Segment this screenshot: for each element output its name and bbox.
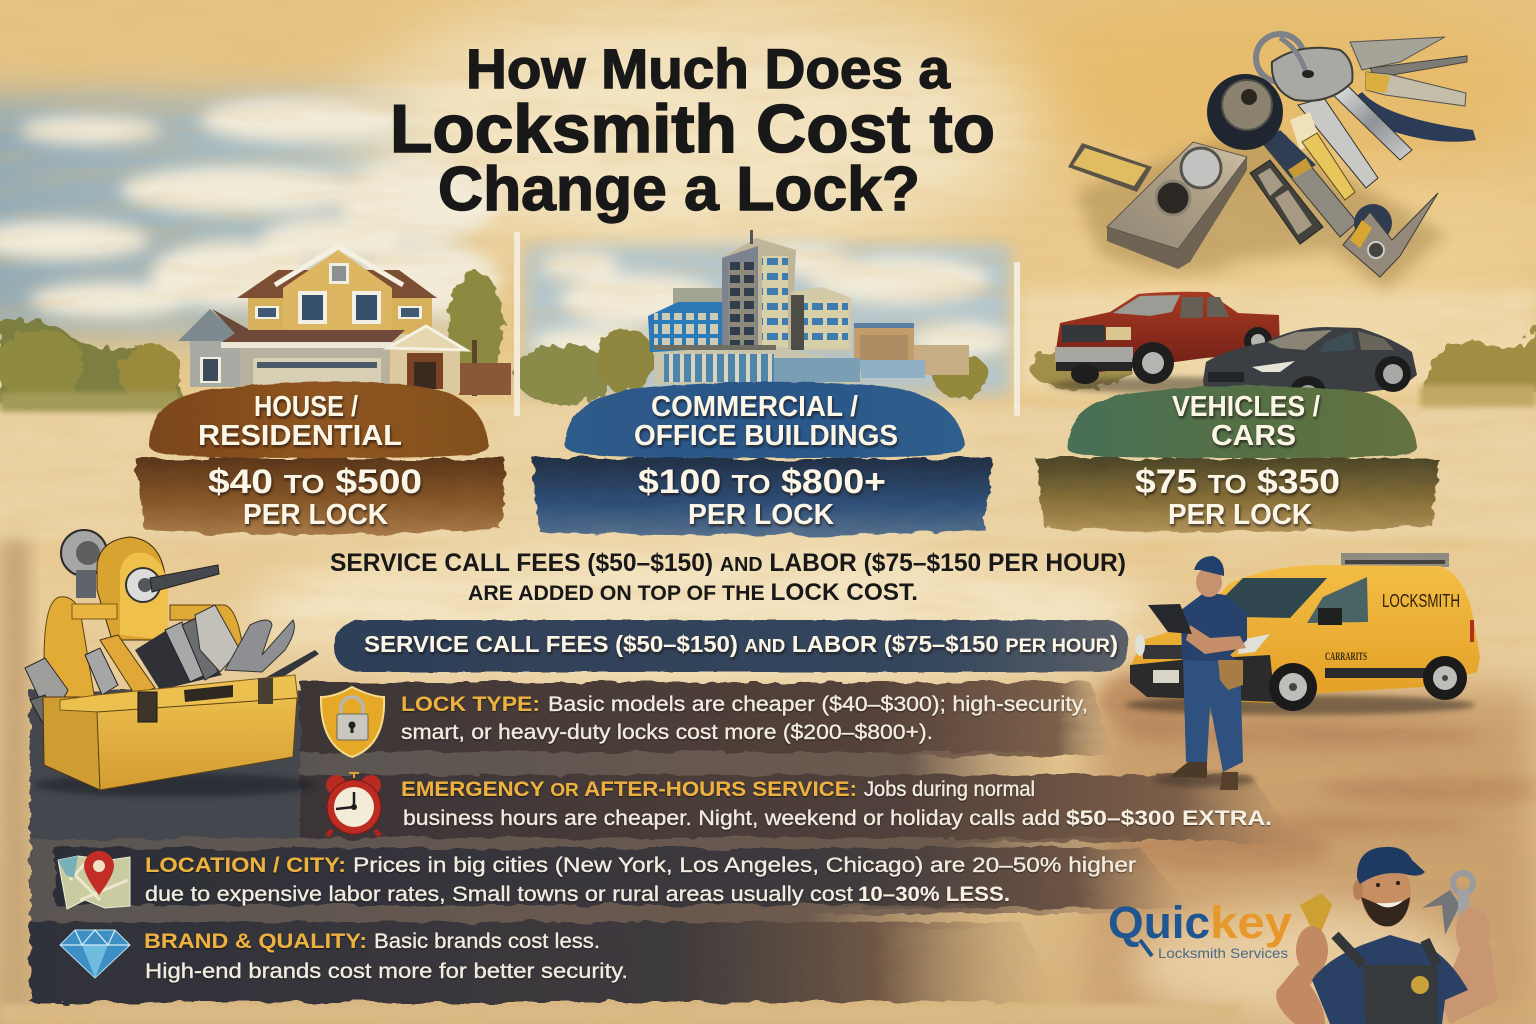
label: house residential xyxy=(198,391,422,531)
band: vehicles price xyxy=(1035,458,1438,532)
icon: alarm clock xyxy=(326,772,381,836)
label: commercial office buildings xyxy=(634,391,898,531)
band: house price xyxy=(135,458,505,535)
note: service call fees: SERVICE CALL FEES ($50–$150) AND LABOR ($75–$150 PER HOUR) xyxy=(330,549,1126,577)
text: location city: 10–30% LESS. xyxy=(858,883,1010,906)
label: house residential: HOUSE / xyxy=(254,391,358,423)
truck wheels xyxy=(1071,327,1272,384)
label: vehicles cars: $75 TO $350 xyxy=(1135,463,1340,501)
van windows xyxy=(1223,577,1368,625)
logo: Quickey Locksmith Services xyxy=(1108,897,1292,961)
text: location city: due to expensive labor rates, Small towns or rural areas usually cost xyxy=(145,883,853,906)
illustration: keys and lock hardware xyxy=(1068,34,1476,290)
label: commercial office buildings: OFFICE BUILDINGS xyxy=(634,420,898,452)
text: emergency service: Jobs during normal xyxy=(864,778,1035,801)
car wheels xyxy=(1289,356,1411,414)
far buildings xyxy=(854,323,969,378)
key ring xyxy=(1256,34,1304,82)
text: location city: Prices in big cities (New York, Los Angeles, Chicago) are 20–50% higher xyxy=(353,854,1136,877)
tower xyxy=(722,230,796,350)
clamp and handle xyxy=(44,530,243,700)
roof rack xyxy=(1341,553,1449,567)
title: Locksmith Cost to xyxy=(390,91,995,167)
illustration: house xyxy=(178,246,511,396)
van bumper and grille xyxy=(1130,620,1474,702)
illustration: technician with clipboard xyxy=(1148,556,1255,790)
text: lock type: Basic models are cheaper ($40–$300); high-security, xyxy=(548,693,1088,716)
text: brand and quality: High-end brands cost more for better security. xyxy=(145,960,628,983)
head xyxy=(1194,556,1224,597)
car lights and grille xyxy=(1208,361,1295,382)
tool pouch xyxy=(1218,660,1243,690)
fanned keys xyxy=(1262,37,1476,237)
label: commercial office buildings: COMMERCIAL / xyxy=(651,391,858,423)
torso xyxy=(1181,592,1247,662)
label: commercial office buildings: PER LOCK xyxy=(688,499,834,531)
note: service call fees xyxy=(330,549,1126,606)
pill: service call fees banner xyxy=(334,620,1128,672)
boots xyxy=(1170,762,1238,790)
text: lock type: smart, or heavy-duty locks cost more ($200–$800+). xyxy=(401,721,933,744)
apron xyxy=(1335,935,1438,1024)
logo: Quickey Locksmith Services: key xyxy=(1210,897,1292,948)
illustration: pickup truck xyxy=(1050,292,1290,393)
text: location city: LOCATION / CITY: xyxy=(145,854,346,877)
title: How Much Does a xyxy=(466,37,951,100)
cab windows xyxy=(1113,295,1229,318)
illustration: locksmith van xyxy=(1125,553,1480,715)
bottom tool xyxy=(1343,193,1438,277)
key fob xyxy=(1250,160,1323,244)
side wing xyxy=(791,287,851,350)
illustration: sedan car xyxy=(1203,327,1417,414)
band: commercial price xyxy=(532,458,992,536)
white poles xyxy=(514,232,1020,416)
gable trim xyxy=(275,246,403,285)
pill: vehicles xyxy=(1067,386,1417,458)
gold tag xyxy=(1068,143,1152,192)
torso xyxy=(1312,935,1468,1024)
icon: shield with padlock xyxy=(321,687,384,757)
title xyxy=(390,37,995,224)
label: house residential: RESIDENTIAL xyxy=(198,420,402,452)
text: brand and quality xyxy=(144,930,628,983)
left wrench xyxy=(25,658,82,750)
van wheels xyxy=(1269,656,1467,711)
panel: dark textured background behind factors xyxy=(30,682,1300,1002)
label: house residential: $40 TO $500 xyxy=(208,463,422,501)
porch xyxy=(388,326,466,393)
pill: service call fees banner: SERVICE CALL FEES ($50–$150) AND LABOR ($75–$150 PER HOUR) xyxy=(364,631,1118,657)
van body xyxy=(1130,565,1480,703)
bumper and grille xyxy=(1055,325,1133,371)
lower roof xyxy=(222,330,405,344)
text: lock type xyxy=(401,693,1088,744)
arms xyxy=(1276,945,1498,1024)
illustration: smiling locksmith with keys xyxy=(1276,847,1498,1024)
pill: house xyxy=(149,382,489,458)
hand keys xyxy=(1296,893,1332,974)
text: emergency service: business hours are cheaper. Night, weekend or holiday calls add xyxy=(403,807,1060,830)
left wing xyxy=(178,309,250,387)
round key head xyxy=(1272,48,1352,101)
garage xyxy=(240,348,390,390)
ring keys xyxy=(1422,873,1490,957)
text: location city xyxy=(145,854,1136,906)
label: vehicles cars: PER LOCK xyxy=(1168,499,1312,531)
illustration: toolbox xyxy=(25,530,319,797)
van panel text: LOCKSMITH xyxy=(1382,591,1460,611)
tree line and grass xyxy=(0,270,1536,405)
label: vehicles cars: CARS xyxy=(1211,420,1296,452)
icon: map with pin xyxy=(58,851,130,909)
text: brand and quality: BRAND & QUALITY: xyxy=(144,930,367,953)
label: vehicles cars xyxy=(1135,391,1340,531)
pill: commercial xyxy=(565,382,965,458)
head xyxy=(1353,847,1425,926)
box body xyxy=(43,675,298,790)
title: Change a Lock? xyxy=(438,155,920,224)
text: brand and quality: Basic brands cost less. xyxy=(374,930,600,953)
right tree trunk and fence xyxy=(459,340,511,396)
van panel text: CARRARITS xyxy=(1325,649,1367,663)
label: house residential: PER LOCK xyxy=(243,499,388,531)
text: emergency service: EMERGENCY OR AFTER-HOURS SERVICE: xyxy=(401,778,857,801)
dark lock cylinder xyxy=(1207,74,1283,150)
podium xyxy=(654,345,862,384)
note: service call fees: ARE ADDED ON TOP OF THE LOCK COST. xyxy=(468,579,918,606)
icon: diamond xyxy=(60,930,130,978)
logo: Quickey Locksmith Services: Quic xyxy=(1108,897,1210,948)
logo: Quickey Locksmith Services: Locksmith Services xyxy=(1158,945,1288,961)
legs xyxy=(1183,660,1243,772)
blue block xyxy=(648,288,722,352)
text: lock type: LOCK TYPE: xyxy=(401,693,540,716)
main roof xyxy=(237,270,437,298)
car windows xyxy=(1268,330,1394,352)
upper windows xyxy=(255,263,422,324)
tools in box xyxy=(85,605,319,695)
arm xyxy=(1186,625,1246,654)
upper wall xyxy=(248,250,432,334)
text: emergency service: $50–$300 EXTRA. xyxy=(1066,807,1272,830)
tablet xyxy=(1148,604,1192,634)
text: emergency service xyxy=(401,778,1272,830)
label: commercial office buildings: $100 TO $800+ xyxy=(638,463,886,501)
illustration: office buildings xyxy=(648,230,969,384)
metal block xyxy=(1107,142,1247,269)
van panel text xyxy=(1325,591,1460,663)
label: vehicles cars: VEHICLES / xyxy=(1172,391,1320,423)
